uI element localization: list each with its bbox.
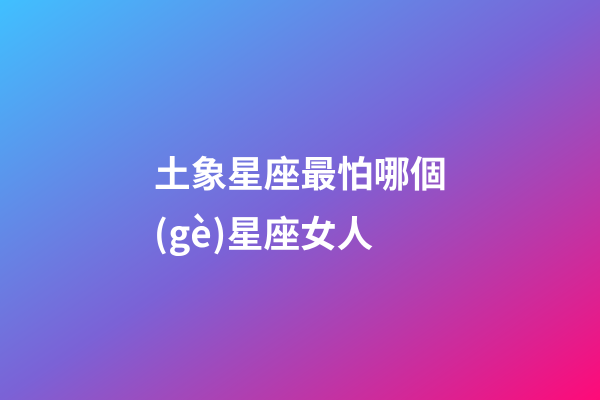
title bbox=[154, 145, 447, 258]
title: (gè)星座女人 bbox=[154, 205, 373, 258]
title: 土象星座最怕哪個 bbox=[154, 145, 447, 198]
